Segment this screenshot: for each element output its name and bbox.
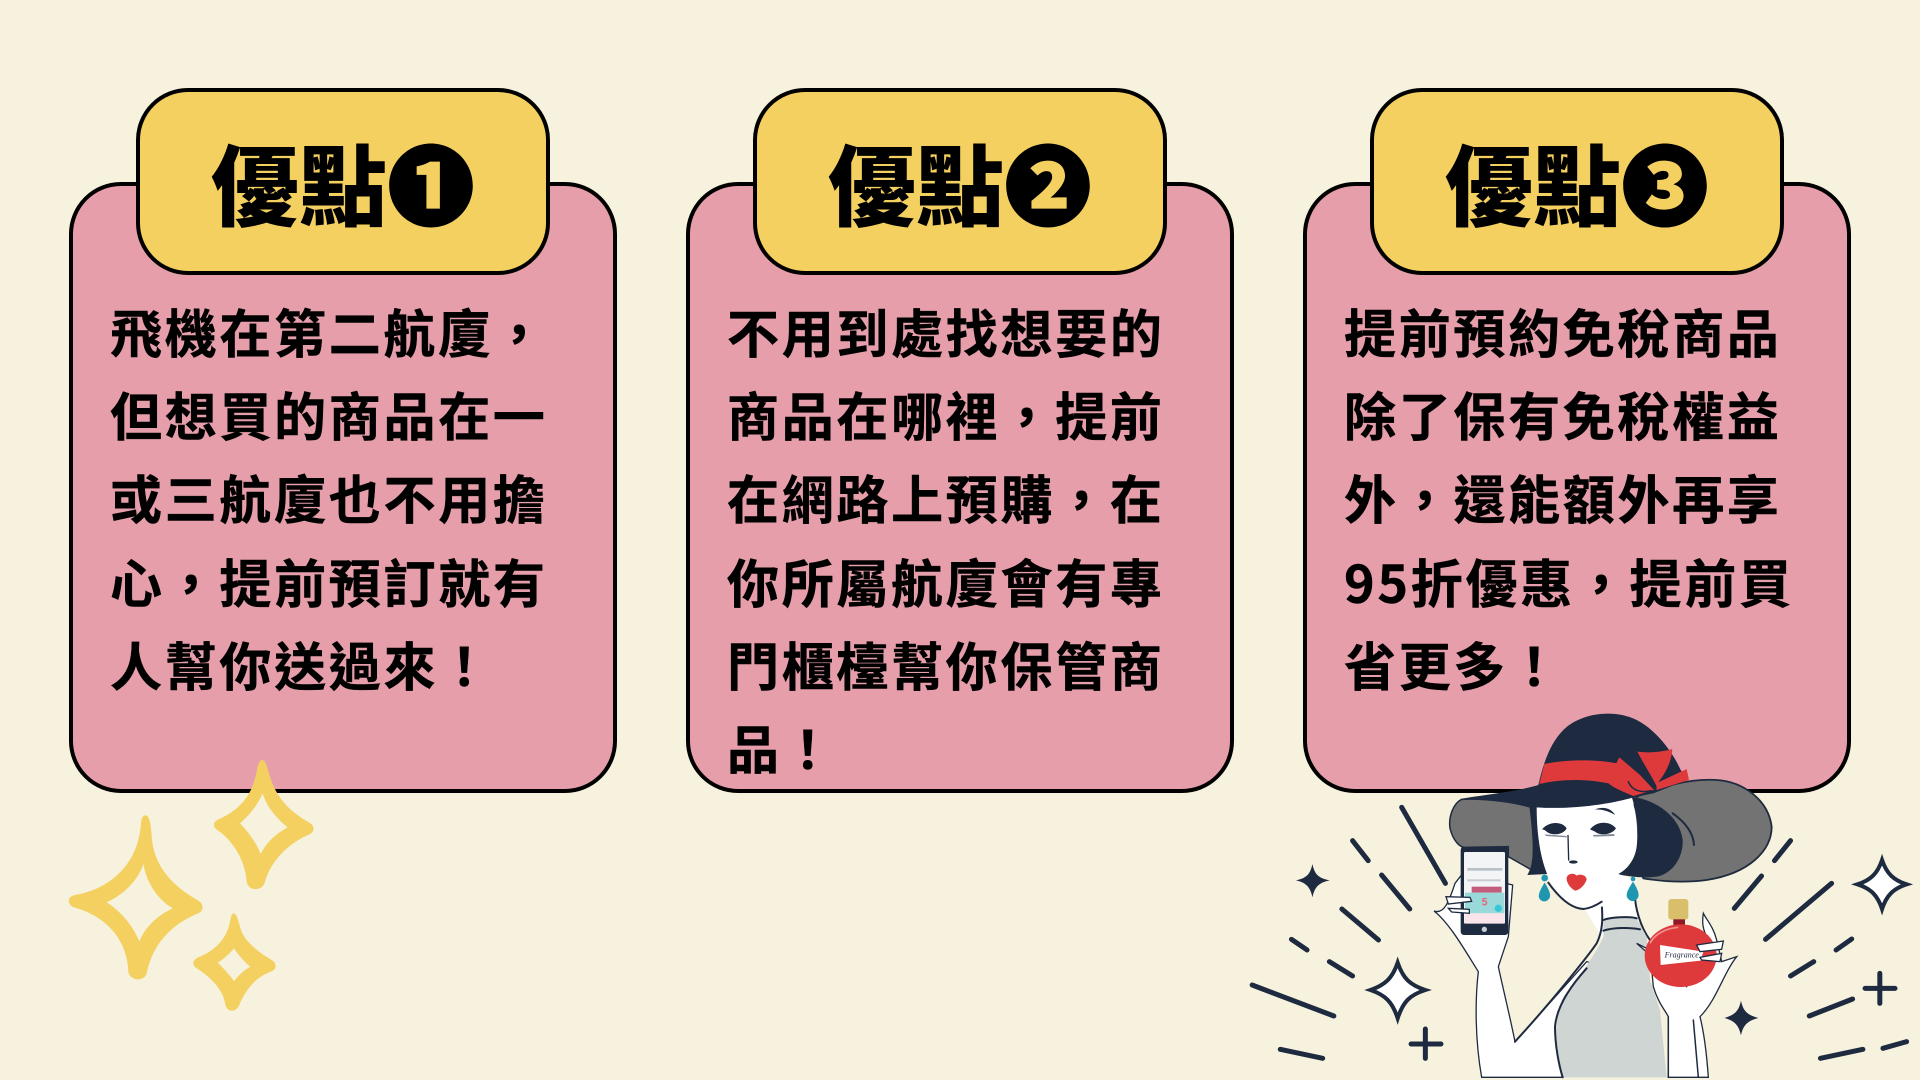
hat ribbon and bow: [1539, 749, 1689, 796]
panel: advantage 1: [69, 182, 617, 793]
text block: advantage 3: 提前預約免稅商品: [1344, 293, 1782, 368]
perfume bottle: Fragrance: [1664, 951, 1699, 960]
icon: yellow sparkles: [69, 760, 314, 1011]
right arm and hand: [1637, 913, 1737, 1077]
text block: advantage 2: 在網路上預購，在: [727, 459, 1165, 534]
neck: [1583, 877, 1640, 940]
text block: advantage 2: [727, 293, 1165, 784]
earrings: [1539, 875, 1639, 901]
heading tab: advantage 2: 優點❷: [828, 118, 1092, 245]
eyes, brows and nose: [1542, 808, 1616, 864]
text block: advantage 1: 心，提前預訂就有: [110, 543, 548, 618]
text block: advantage 1: 飛機在第二航廈，: [110, 293, 548, 368]
face: [1537, 798, 1637, 909]
heading tab: advantage 3: 優點❸: [1445, 118, 1709, 245]
text block: advantage 2: 你所屬航廈會有專: [727, 543, 1165, 618]
text block: advantage 3: 外，還能額外再享: [1344, 459, 1782, 534]
text block: advantage 3: [1344, 293, 1794, 701]
hat crown: [1460, 714, 1688, 808]
text block: advantage 2: 品！: [727, 709, 836, 784]
heading tab: advantage 1: [136, 88, 550, 275]
dress: [1556, 917, 1667, 1077]
phone: 5: [1482, 897, 1488, 909]
text block: advantage 1: 但想買的商品在一: [110, 376, 548, 451]
illustration: woman's body, arms, phone and perfume: [1434, 847, 1737, 1077]
heading tab: advantage 3: [1370, 88, 1784, 275]
heading tab: advantage 1: 優點❶: [211, 118, 475, 245]
text block: advantage 1: [110, 293, 548, 701]
left arm and shoulder: [1434, 873, 1607, 1077]
text block: advantage 1: 人幫你送過來！: [110, 626, 493, 701]
perfume bottle: [1645, 899, 1723, 987]
hair: [1527, 797, 1683, 877]
text block: advantage 1: 或三航廈也不用擔: [110, 459, 548, 534]
text block: advantage 3: 除了保有免稅權益: [1344, 376, 1782, 451]
hat brim: [1450, 780, 1772, 882]
text block: advantage 3: 95折優惠，提前買: [1344, 543, 1794, 618]
lips: [1567, 874, 1587, 891]
text block: advantage 3: 省更多！: [1344, 626, 1563, 701]
panel: advantage 2: [686, 182, 1234, 793]
illustration: burst lines and stars: [1252, 807, 1907, 1058]
illustration: woman's head and hat: [1450, 714, 1772, 909]
burst lines: [1252, 807, 1907, 1058]
solid and outline stars: [1296, 860, 1907, 1035]
text block: advantage 2: 門櫃檯幫你保管商: [727, 626, 1165, 701]
heading tab: advantage 2: [753, 88, 1167, 275]
phone: [1446, 847, 1508, 935]
panel: advantage 3: [1303, 182, 1851, 793]
text block: advantage 2: 不用到處找想要的: [727, 293, 1165, 368]
text block: advantage 2: 商品在哪裡，提前: [727, 376, 1165, 451]
